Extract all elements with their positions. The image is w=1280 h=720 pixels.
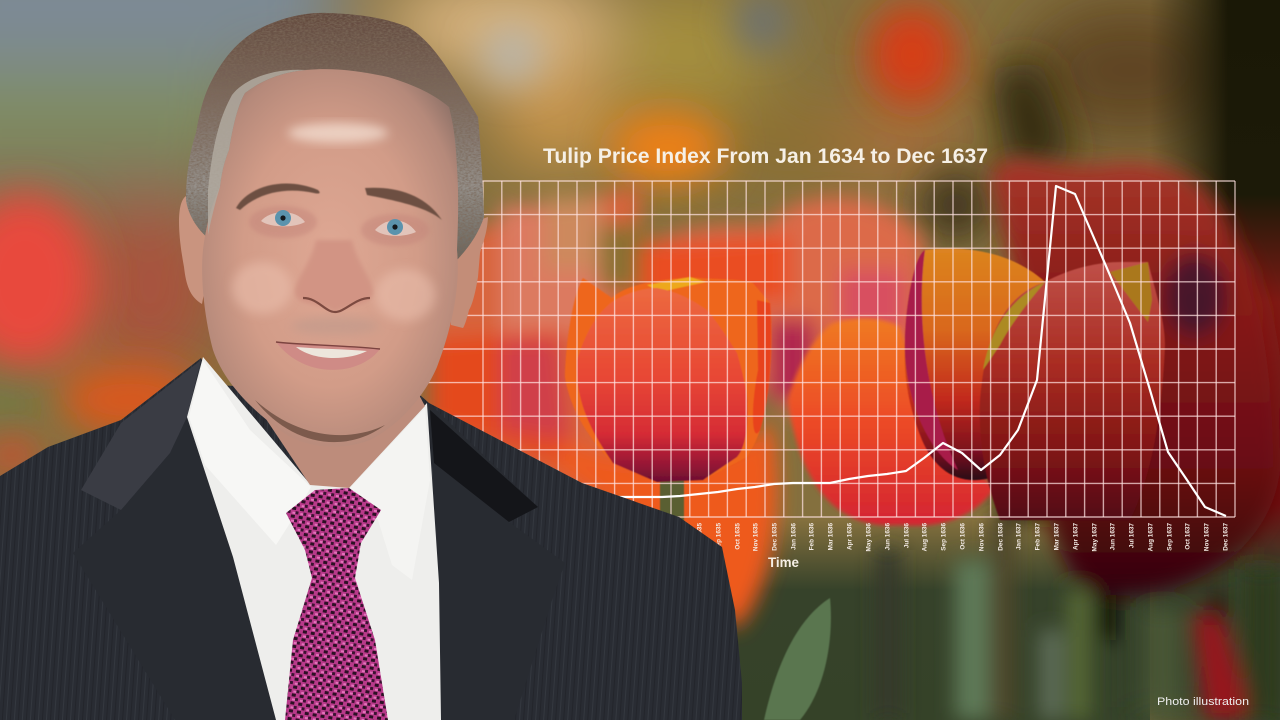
leaf xyxy=(764,598,831,720)
forehead highlight xyxy=(288,123,388,143)
month tick labels: Sep 1636 xyxy=(940,523,948,551)
month tick labels: Jan 1636 xyxy=(790,523,798,550)
month tick labels: Jul 1635 xyxy=(678,523,684,548)
blurred rear tulip: upper middle xyxy=(640,197,925,420)
neck xyxy=(250,360,425,488)
right eyebrow xyxy=(365,188,442,220)
month tick labels: Apr 1636 xyxy=(846,523,854,550)
tulip: right pair xyxy=(905,248,1165,520)
left eyebrow xyxy=(236,184,320,210)
month tick labels: Aug 1637 xyxy=(1148,523,1154,551)
hairline grey band xyxy=(208,70,306,235)
month tick labels: Dec 1636 xyxy=(998,523,1004,551)
rear wash behind chart xyxy=(430,185,640,520)
month tick labels: Jun 1636 xyxy=(884,523,892,550)
cheek highlights xyxy=(232,262,292,314)
lower green ground xyxy=(700,520,1150,720)
chart title: Tulip Price Index From Jan 1634 to Dec 1637 xyxy=(543,145,988,168)
right lapel xyxy=(429,403,565,720)
right eye xyxy=(375,219,416,236)
left eye xyxy=(261,210,305,226)
mouth xyxy=(276,342,380,370)
axis label: time: Time xyxy=(768,555,799,570)
month tick labels: May 1637 xyxy=(1092,523,1098,551)
month tick labels: Jun 1637 xyxy=(1110,523,1116,550)
nose underside xyxy=(303,298,370,312)
shirt collar xyxy=(189,360,311,545)
month tick labels: Nov 1636 xyxy=(978,523,986,551)
month tick labels: Oct 1636 xyxy=(960,523,966,550)
month tick labels: Mar 1636 xyxy=(828,523,834,550)
suit jacket xyxy=(0,358,742,720)
month tick labels: Feb 1637 xyxy=(1034,523,1042,550)
month tick labels: Nov 1637 xyxy=(1204,523,1210,551)
man: portrait cut-out xyxy=(0,13,742,720)
jaw shadow xyxy=(255,400,385,442)
hair xyxy=(186,13,484,260)
month tick labels: Aug 1635 xyxy=(696,523,704,551)
month tick labels: Jan 1637 xyxy=(1016,523,1022,550)
left lapel xyxy=(73,417,276,720)
month tick labels: Sep 1635 xyxy=(716,523,722,551)
credit: photo illustration: Photo illustration xyxy=(1157,696,1249,708)
left collar band xyxy=(81,360,201,510)
right eye socket xyxy=(361,214,429,246)
necktie xyxy=(285,488,388,720)
price line xyxy=(600,186,1226,516)
right ear xyxy=(450,217,488,328)
shirt xyxy=(187,357,441,720)
month tick labels: Oct 1637 xyxy=(1184,523,1192,550)
chart grid xyxy=(333,181,1235,517)
blurred dark tulip: right xyxy=(990,159,1280,596)
nose xyxy=(295,240,373,312)
shirt right collar xyxy=(350,408,430,580)
month tick labels: Nov 1635 xyxy=(752,523,760,551)
month tick labels: Apr 1637 xyxy=(1072,523,1080,550)
month tick labels: Jul 1636 xyxy=(904,523,910,548)
right edge: dark top, red middle, green base xyxy=(1150,0,1280,720)
month tick labels: Feb 1636 xyxy=(808,523,816,550)
month tick labels: Jul 1637 xyxy=(1128,523,1136,548)
month tick labels: May 1636 xyxy=(866,523,872,551)
month tick labels: Aug 1636 xyxy=(922,523,928,551)
tulip: front left xyxy=(565,277,772,526)
month tick labels: Dec 1637 xyxy=(1222,523,1230,551)
face xyxy=(202,69,458,447)
chin stubble shadow xyxy=(291,317,379,335)
left ear xyxy=(179,196,212,304)
month tick labels: Dec 1635 xyxy=(772,523,778,551)
tulip: centre xyxy=(788,318,995,526)
left eye socket xyxy=(249,206,317,238)
chart: tulip price index xyxy=(333,145,1235,570)
month tick labels xyxy=(678,523,1230,551)
month tick labels: Sep 1637 xyxy=(1166,523,1174,551)
right collar shadow xyxy=(430,410,538,522)
month tick labels: Oct 1635 xyxy=(734,523,742,550)
month tick labels: Mar 1637 xyxy=(1054,523,1060,550)
